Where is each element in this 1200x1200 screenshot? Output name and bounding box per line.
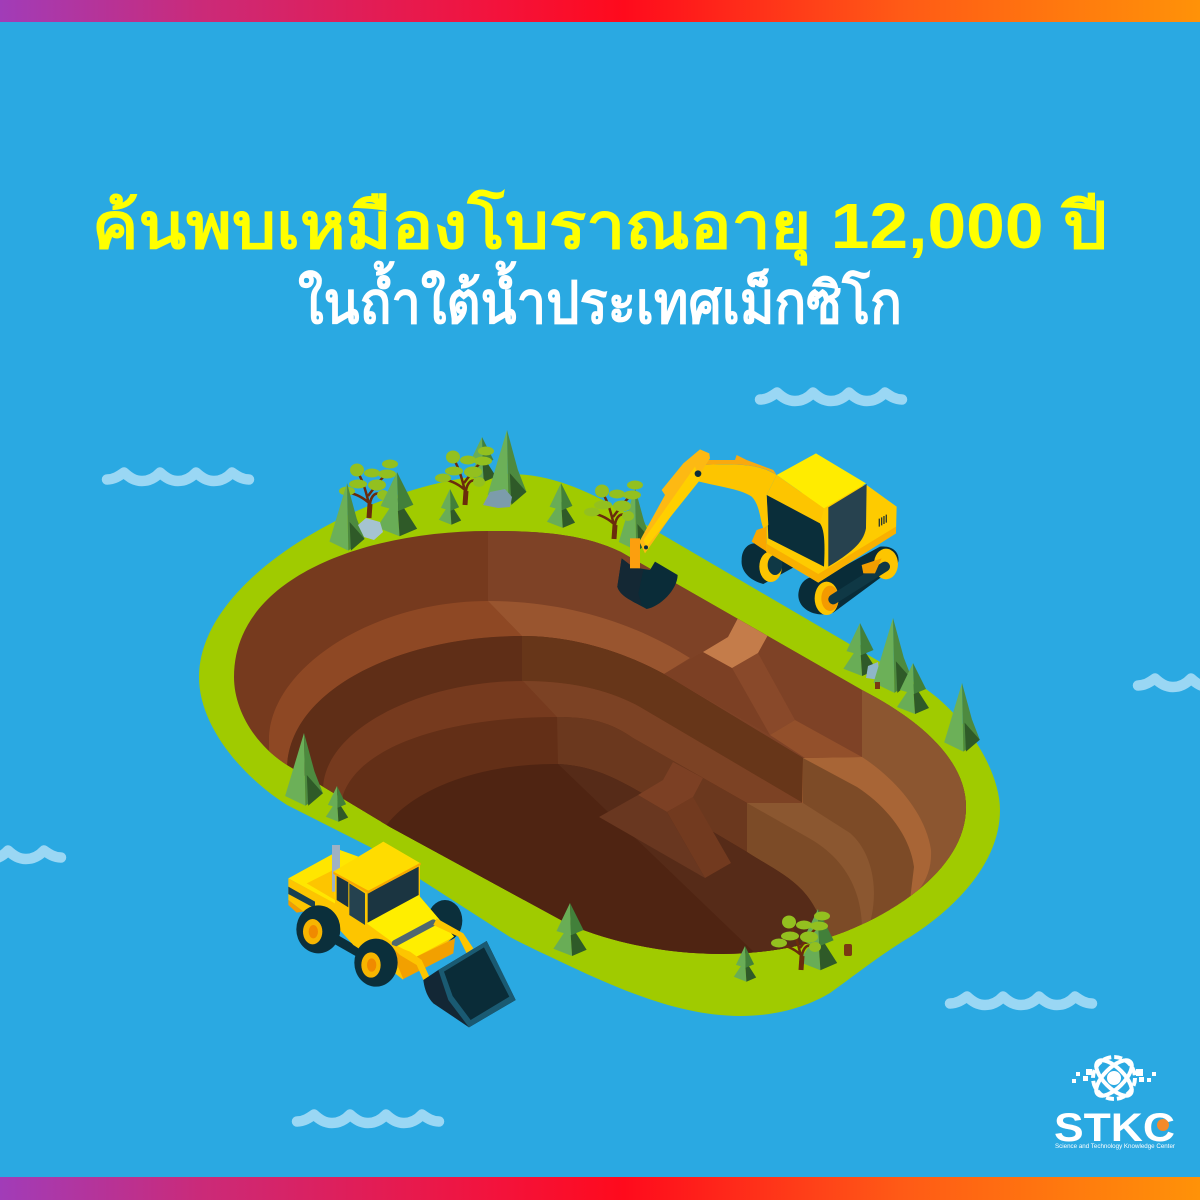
undercarriage (333, 933, 363, 957)
mine pit (234, 531, 966, 954)
pixel dots (1072, 1069, 1156, 1083)
loader arms (433, 918, 473, 953)
excavator (617, 449, 899, 615)
rear body (288, 850, 358, 905)
exhaust (332, 845, 340, 892)
wheel loader (288, 842, 516, 1027)
bucket (617, 558, 678, 609)
right terrace bands (802, 757, 931, 896)
lower ramp (599, 762, 731, 878)
rear track (742, 543, 795, 584)
bottom gradient bar (0, 1177, 1200, 1200)
pit floor (386, 764, 817, 954)
island with mine pit (199, 474, 1000, 1016)
STKC logo (1054, 1055, 1175, 1150)
bucket (423, 941, 516, 1027)
band two (269, 601, 522, 765)
far wheel (428, 900, 462, 941)
rock top (483, 489, 512, 508)
title line 1: ค้นพบเหมืองโบราณอายุ 12,000 ปี (92, 188, 1107, 266)
layer four (323, 681, 557, 900)
atom icon (1091, 1055, 1137, 1101)
left pines (285, 733, 323, 806)
right pines (843, 623, 877, 676)
layer five (342, 717, 558, 900)
cab backing (335, 865, 454, 979)
pit wall (234, 531, 966, 954)
bottom pines (553, 903, 587, 956)
cab windows (767, 495, 825, 567)
top gradient bar (0, 0, 1200, 22)
subtitle: ในถ้ำใต้น้ำประเทศเม็กซิโก (298, 261, 902, 336)
logo caption: Science and Technology Knowledge Center (1055, 1144, 1175, 1150)
wheels (296, 905, 340, 953)
back pines top (468, 437, 496, 482)
hood (367, 895, 454, 957)
logo wordmark: STKC (1054, 1106, 1175, 1150)
rock left (358, 518, 383, 540)
trees and rocks on island (285, 430, 980, 982)
layer three (287, 636, 803, 900)
island grass (199, 474, 1000, 1016)
vent grill (879, 515, 886, 527)
cab (337, 875, 348, 907)
upper ramp (703, 618, 862, 758)
water waves (0, 392, 1200, 1123)
boom (693, 464, 777, 528)
cab body (752, 527, 767, 552)
front track (798, 546, 899, 614)
arm (639, 449, 710, 553)
